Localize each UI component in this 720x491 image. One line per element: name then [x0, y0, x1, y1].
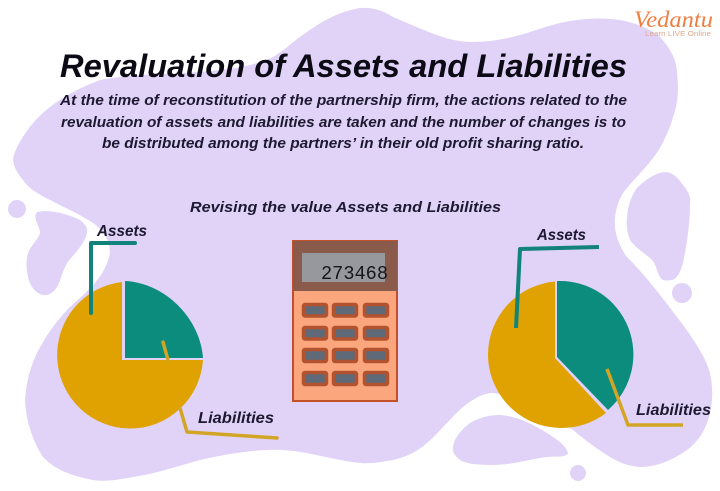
logo: Vedantu: Vedantu	[634, 7, 713, 32]
left pie chart	[57, 281, 203, 429]
assets slice, left pie	[125, 281, 203, 358]
calculator readout: 273468	[321, 263, 388, 285]
description text	[59, 92, 627, 152]
left liabilities callout: Liabilities	[198, 410, 274, 427]
right liabilities callout: Liabilities	[636, 402, 711, 419]
calculator keys	[304, 304, 388, 384]
description text: At the time of reconstitution of the partnership firm, the actions related to the	[59, 92, 627, 109]
calculator screen	[302, 253, 385, 282]
title: Revaluation of Assets and Liabilities	[60, 48, 627, 84]
assets slice, right pie	[557, 281, 633, 410]
right assets callout: Assets	[536, 227, 586, 244]
calculator	[293, 241, 397, 401]
liabilities slice, right pie	[488, 282, 606, 428]
right pie chart	[488, 281, 633, 428]
calculator body	[293, 241, 397, 401]
calculator header	[293, 241, 397, 291]
left assets callout: Assets	[96, 223, 147, 240]
right liabilities callout	[607, 369, 711, 425]
description text: be distributed among the partners’ in their old profit sharing ratio.	[102, 135, 584, 152]
liabilities slice, left pie	[57, 282, 203, 429]
logo: Vedantu: Learn LIVE Online	[645, 31, 711, 38]
description text: revaluation of assets and liabilities are taken and the number of changes is to	[61, 114, 626, 131]
left liabilities callout	[163, 342, 277, 438]
subheading: Revising the value Assets and Liabilities	[190, 199, 501, 216]
left assets callout	[91, 223, 147, 313]
right assets callout	[516, 227, 599, 328]
